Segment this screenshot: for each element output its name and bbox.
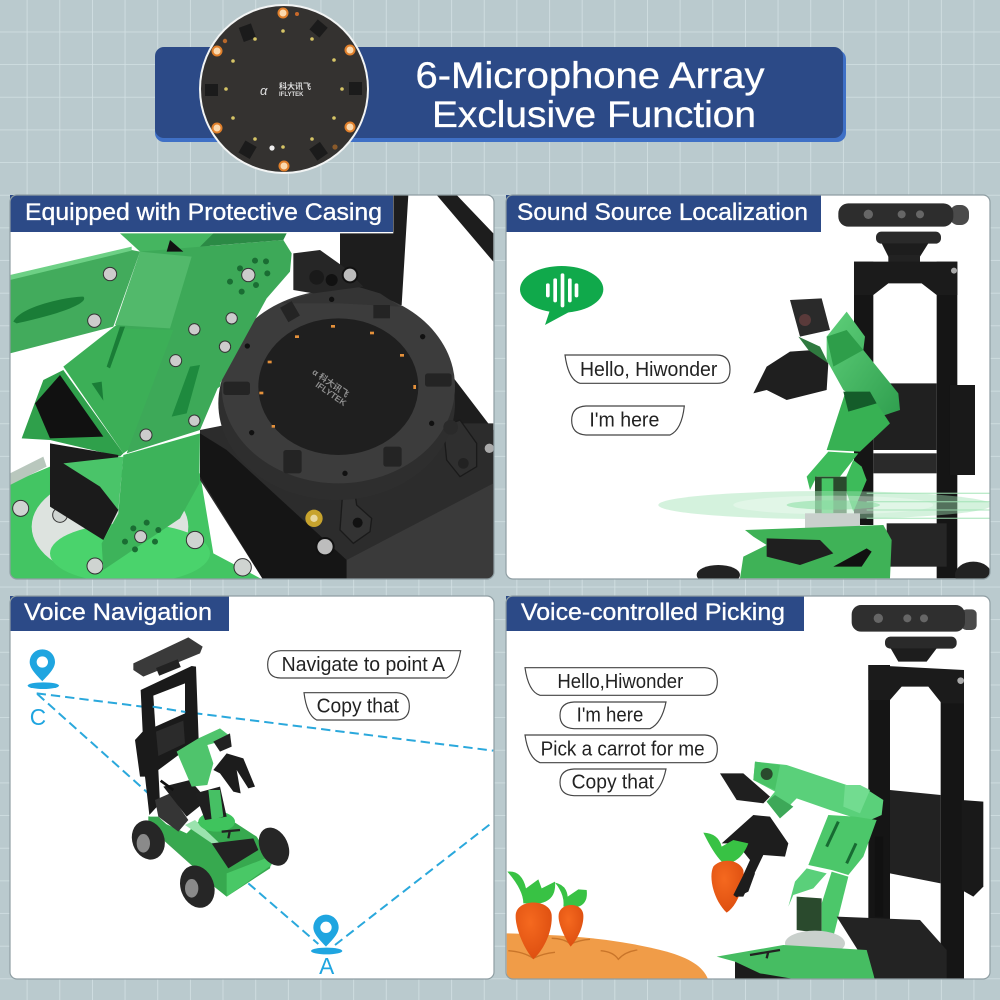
sound ripples bbox=[658, 491, 993, 519]
panel: sound source localization bbox=[506, 195, 993, 588]
black control board bbox=[200, 420, 493, 580]
microphone casing bbox=[218, 250, 494, 500]
robot arm bbox=[753, 298, 900, 513]
microphone casing: α 科大讯飞 bbox=[311, 366, 352, 399]
black frame behind casing bbox=[333, 195, 493, 580]
icon: map pin A bbox=[311, 915, 342, 979]
icon: map pin A: A bbox=[319, 953, 335, 979]
speech bubble: I'm here bbox=[572, 406, 684, 435]
icon: green voice bubble bbox=[520, 266, 603, 325]
speech bubbles: I'm here bbox=[577, 704, 643, 726]
speech bubbles: Pick a carrot for me bbox=[541, 738, 705, 760]
panel 2 heading: Sound Source Localization bbox=[517, 199, 808, 226]
speech bubble: I'm here: I'm here bbox=[589, 410, 659, 432]
ground bbox=[507, 933, 708, 980]
icon: map pin C: C bbox=[30, 704, 46, 730]
microphone array board bbox=[199, 4, 369, 174]
title banner: 6-Microphone Array bbox=[416, 55, 765, 96]
panel 1 heading bbox=[10, 195, 393, 232]
speech bubbles: Copy that bbox=[572, 771, 654, 793]
icon: map pin C bbox=[28, 649, 59, 730]
panel 3 heading: Voice Navigation bbox=[24, 599, 212, 626]
microphone array board: 科大讯飞 bbox=[279, 81, 311, 91]
panel: protective casing bbox=[10, 195, 494, 583]
microphone array board: IFLYTEK bbox=[279, 92, 304, 98]
carrots on ground bbox=[507, 872, 587, 959]
speech bubbles bbox=[525, 668, 717, 796]
green arm bracket bbox=[10, 233, 292, 570]
robot car bbox=[126, 637, 295, 913]
panel 1 heading: Equipped with Protective Casing bbox=[25, 199, 382, 226]
speech bubble: Hello, Hiwonder bbox=[565, 355, 730, 383]
panel 4 heading bbox=[506, 596, 804, 631]
mounting base bbox=[10, 457, 263, 583]
speech bubbles: Hello,Hiwonder bbox=[557, 671, 684, 693]
robot base bbox=[696, 513, 990, 578]
speech bubble: Navigate to point A: Navigate to point A bbox=[282, 654, 446, 676]
speech bubble: Copy that: Copy that bbox=[317, 696, 399, 718]
panel 2 heading bbox=[506, 195, 821, 232]
speech bubble: Hello, Hiwonder: Hello, Hiwonder bbox=[580, 359, 718, 381]
panel 4 heading: Voice-controlled Picking bbox=[521, 599, 785, 626]
title banner bbox=[155, 47, 846, 142]
robot frame and camera bbox=[852, 605, 983, 980]
panel: voice-controlled picking bbox=[506, 596, 990, 980]
panel borders bbox=[10, 195, 990, 979]
robot arm and held carrot bbox=[703, 762, 947, 980]
speech bubble: Navigate to point A bbox=[268, 651, 461, 678]
microphone array board: α bbox=[260, 83, 268, 98]
speech bubble: Copy that bbox=[304, 693, 409, 720]
panel 3 heading bbox=[10, 596, 229, 631]
robot frame and camera bbox=[838, 203, 975, 578]
title banner: Exclusive Function bbox=[432, 94, 756, 135]
panel: voice navigation bbox=[10, 596, 494, 979]
dashed route lines bbox=[37, 693, 493, 945]
microphone casing: IFLYTEK bbox=[314, 380, 349, 408]
